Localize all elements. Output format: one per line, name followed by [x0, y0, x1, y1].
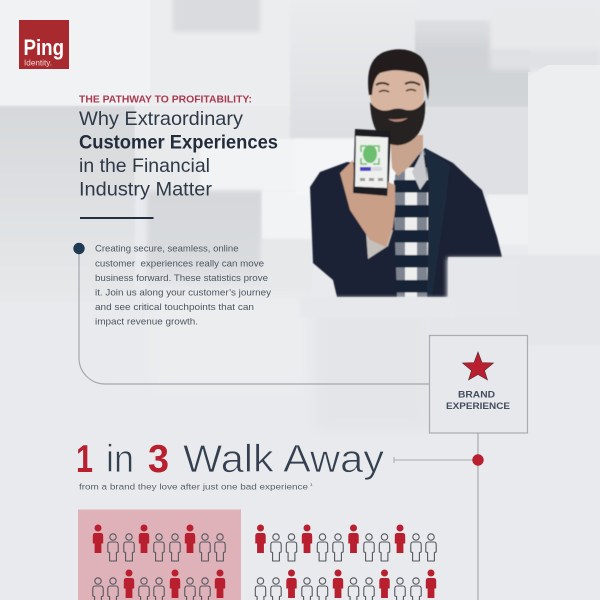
title: Industry Matter	[79, 178, 213, 200]
logo: Ping Identity: Ping	[24, 35, 64, 60]
plaid shirt	[394, 150, 428, 297]
stat subtext: 1	[310, 482, 313, 487]
pictogram: people on pink panel	[93, 524, 225, 600]
hair	[368, 49, 429, 100]
eyes and brows	[376, 82, 420, 92]
neck	[390, 135, 423, 176]
stat heading: in	[106, 438, 134, 481]
box label: EXPERIENCE	[446, 401, 510, 412]
shirt cuff	[366, 230, 393, 259]
phone	[353, 129, 391, 196]
jacket lapel	[425, 148, 450, 297]
intro text: customer experiences really can move	[95, 257, 264, 268]
shirt collar	[412, 150, 427, 190]
photo bottom fade	[300, 258, 517, 318]
stat heading: 1	[76, 438, 93, 481]
title: Customer Experiences	[79, 132, 278, 154]
intro dot	[73, 243, 85, 254]
intro text: business forward. These statistics prove	[95, 272, 268, 283]
logo: Ping Identity: Identity.	[24, 58, 52, 68]
box label: BRAND	[458, 390, 495, 400]
intro text: impact revenue growth.	[95, 316, 198, 327]
title	[79, 108, 278, 200]
intro text: and see critical touchpoints that can	[95, 301, 254, 312]
stat subtext: from a brand they love after just one bad experience	[79, 482, 308, 492]
green face scan	[363, 145, 377, 163]
timeline line	[477, 433, 479, 600]
box label	[446, 390, 510, 412]
intro text: it. Join us along your customer’s journey	[95, 286, 271, 298]
stat heading: 3	[148, 438, 169, 481]
stat heading	[76, 438, 385, 481]
panel: highlighted one-in-three	[78, 510, 241, 600]
stat connector	[394, 457, 473, 463]
stat heading: Walk Away	[183, 438, 385, 481]
icon: star	[462, 352, 494, 380]
jacket	[310, 148, 502, 297]
logo: Ping Identity	[19, 20, 69, 69]
fingers over phone	[387, 182, 395, 205]
photo: man holding phone	[310, 49, 502, 297]
pictogram: people on grey	[255, 524, 436, 600]
hand	[340, 160, 395, 247]
head	[370, 56, 424, 128]
mouth	[388, 118, 408, 122]
beard	[370, 100, 425, 145]
timeline red dot	[472, 454, 484, 466]
intro text: Creating secure, seamless, online	[95, 243, 238, 254]
title: in the Financial	[79, 155, 210, 177]
title divider	[80, 217, 154, 219]
kicker heading: THE PATHWAY TO PROFITABILITY:	[79, 94, 252, 106]
intro text	[95, 243, 271, 327]
connector line: intro to brand experience	[79, 248, 429, 384]
phone screen	[355, 136, 388, 188]
brand experience box	[430, 336, 528, 433]
title: Why Extraordinary	[79, 108, 243, 130]
